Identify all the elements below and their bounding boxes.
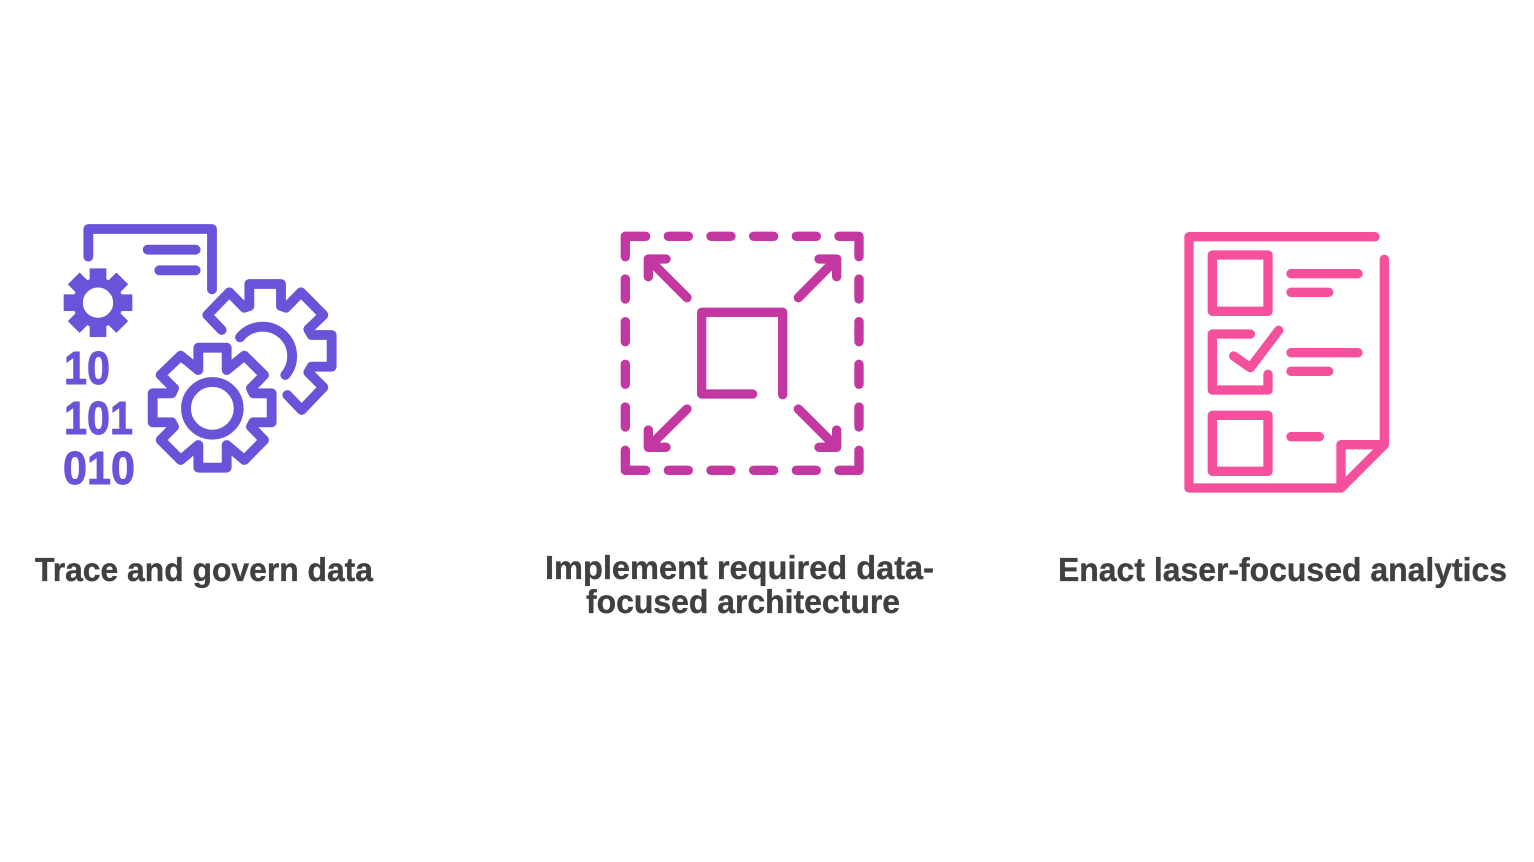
dashed frame: [625, 236, 859, 470]
text lines: [1291, 274, 1358, 437]
label: trace and govern data: Trace and govern data: [35, 551, 374, 588]
label: implement required data-focused architecture: focused architecture: [586, 583, 900, 620]
icon: checklist document: [1189, 237, 1384, 488]
label: enact laser-focused analytics: Enact laser-focused analytics: [1058, 551, 1507, 588]
document outline and lines: [88, 229, 212, 289]
checkboxes: [1212, 255, 1268, 471]
panel: trace and govern data: [35, 229, 374, 588]
icon: upper outline gear: [207, 284, 332, 410]
binary digits: 101: [64, 392, 133, 444]
page outline: [1189, 237, 1384, 488]
icon: expanding square: [625, 236, 859, 470]
binary digits: [63, 342, 135, 494]
four diagonal arrows: [648, 259, 837, 447]
icon: data gears: [63, 229, 332, 494]
check mark: [1234, 330, 1279, 368]
inner square: [702, 312, 783, 395]
panel: data-focused architecture: [545, 236, 934, 620]
icon: small solid gear: [64, 268, 132, 337]
label: implement required data-focused architecture: Implement required data-: [545, 549, 934, 586]
binary digits: 010: [63, 442, 135, 494]
label: implement required data-focused architecture: [545, 549, 934, 620]
binary digits: 10: [64, 342, 110, 394]
icon: lower outline gear: [153, 348, 272, 468]
panel: laser-focused analytics: [1058, 237, 1507, 588]
